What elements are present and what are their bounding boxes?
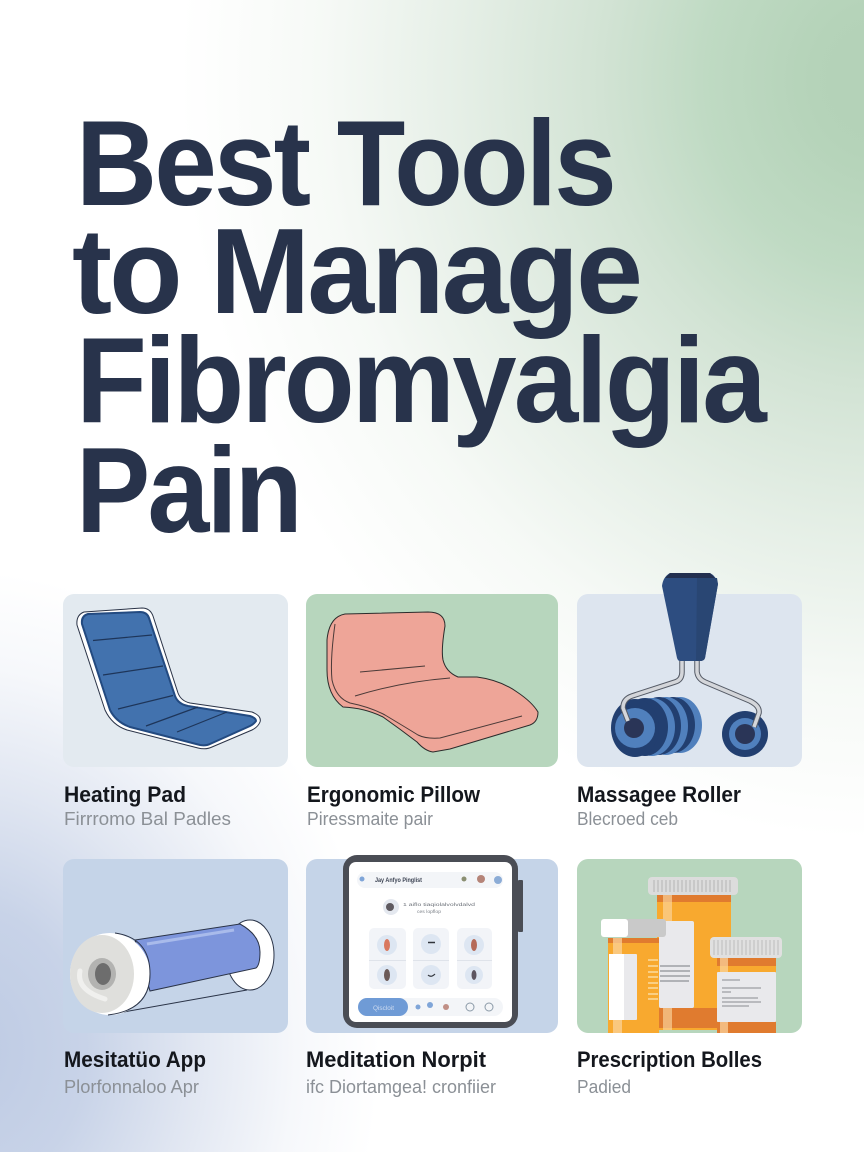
grid of avatars: [369, 928, 492, 989]
text: ergonomic pillow caption: [307, 782, 481, 829]
panel: foam roller: [63, 859, 288, 1033]
title: Pain: [76, 422, 300, 558]
text: prescription bottles caption: Padied: [577, 1076, 631, 1097]
text: heating pad caption: [64, 782, 231, 829]
text: prescription bottles caption: [577, 1047, 762, 1097]
text: ergonomic pillow caption: Ergonomic Pillow: [307, 782, 481, 807]
icon: foam roller: [70, 920, 274, 1015]
icon: tablet: 1 aiflo tiaqiolalvolvdalvd: [403, 902, 476, 907]
text: heating pad caption: Firrromo Bal Padles: [64, 808, 231, 829]
icon: tablet: Jay Anfyo Pinglist: [375, 878, 422, 884]
text: heating pad caption: Heating Pad: [64, 782, 186, 807]
icon: tablet: ces lopflop: [417, 909, 442, 914]
text: meditation app caption: ifc Diortamgea! cronfiier: [306, 1076, 496, 1097]
icon: right bottle: [710, 937, 782, 1033]
text: ergonomic pillow caption: Piressmaite pair: [307, 808, 433, 829]
icon: massage roller: [611, 573, 768, 757]
text: massage roller caption: Massagee Roller: [577, 782, 741, 807]
title: to Manage: [72, 203, 640, 339]
icon: tablet: Qiscloit: [373, 1006, 394, 1012]
panel: massage roller: [577, 573, 802, 767]
title: Fibromyalgia: [76, 312, 768, 448]
text: massage roller caption: [577, 782, 741, 829]
title: Best Tools: [76, 95, 614, 231]
icon: pillow: [327, 612, 538, 752]
text: foam roller caption: Plorfonnaloo Apr: [64, 1076, 199, 1097]
text: massage roller caption: Blecroed ceb: [577, 808, 678, 829]
title: [72, 95, 768, 558]
text: foam roller caption: [64, 1047, 206, 1097]
icon: heating pad: [77, 608, 260, 749]
icon: large bottle: [648, 877, 738, 1030]
panel: prescription bottles: [577, 859, 802, 1033]
panel: meditation app: [306, 855, 558, 1033]
panel: ergonomic pillow: [306, 594, 558, 767]
icon: left bottle: [601, 919, 666, 1033]
text: meditation app caption: [306, 1047, 496, 1097]
icon: tablet: [343, 855, 523, 1028]
text: meditation app caption: Meditation Norpit: [306, 1047, 487, 1072]
text: foam roller caption: Mesitatüo App: [64, 1047, 206, 1072]
panel: heating pad: [63, 594, 288, 767]
text: prescription bottles caption: Prescription Bolles: [577, 1047, 762, 1072]
